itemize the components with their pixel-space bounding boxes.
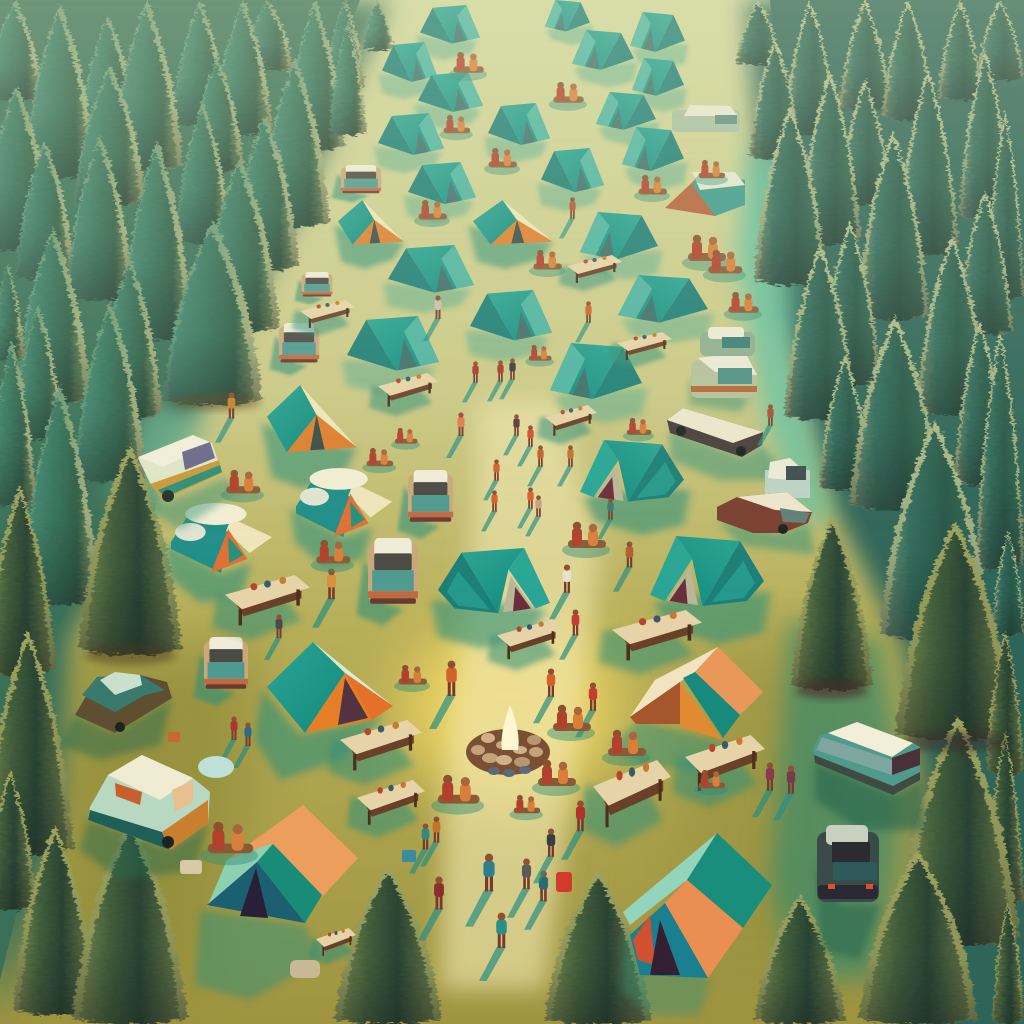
dome tent centre xyxy=(290,468,392,567)
large orange tent xyxy=(195,805,358,1000)
tree base shadows xyxy=(84,394,1011,752)
campers xyxy=(215,197,795,981)
large teal and orange tent xyxy=(620,833,772,1015)
tent near fire left xyxy=(255,642,393,780)
dark sedan xyxy=(816,825,880,960)
distant sedan xyxy=(295,272,332,304)
middle teal tents xyxy=(341,212,771,648)
teal shade along right tree line xyxy=(110,150,905,980)
mint car behind xyxy=(700,327,755,356)
grey and orange tent xyxy=(665,172,745,216)
dome tent left xyxy=(165,503,272,603)
sedan centre left xyxy=(357,538,418,626)
sedan centre xyxy=(398,470,453,539)
vehicles xyxy=(60,105,925,960)
left forest xyxy=(0,0,442,1024)
flatbed truck xyxy=(717,492,815,555)
campfire xyxy=(466,705,550,777)
sedan below dome tent xyxy=(194,637,248,706)
orange tent upper centre xyxy=(468,200,553,269)
van right xyxy=(813,722,925,830)
sunlit dirt path xyxy=(440,400,600,990)
hatchback xyxy=(60,672,172,760)
sedan upper left xyxy=(270,323,319,376)
tent near fire right xyxy=(610,647,763,770)
camping gear xyxy=(168,732,572,978)
pickup xyxy=(667,408,790,480)
distant sedan xyxy=(332,165,381,202)
orange tent upper left xyxy=(334,200,404,269)
camper van xyxy=(80,755,210,880)
right forest xyxy=(544,0,1024,1024)
distant camper xyxy=(672,105,740,132)
van left xyxy=(138,435,240,530)
white car right xyxy=(765,458,810,498)
orange tent mid left xyxy=(262,385,357,489)
picnic tables xyxy=(212,255,765,964)
seated camper groups xyxy=(200,52,762,865)
distant teal tents xyxy=(374,0,688,222)
mint car xyxy=(690,352,757,412)
